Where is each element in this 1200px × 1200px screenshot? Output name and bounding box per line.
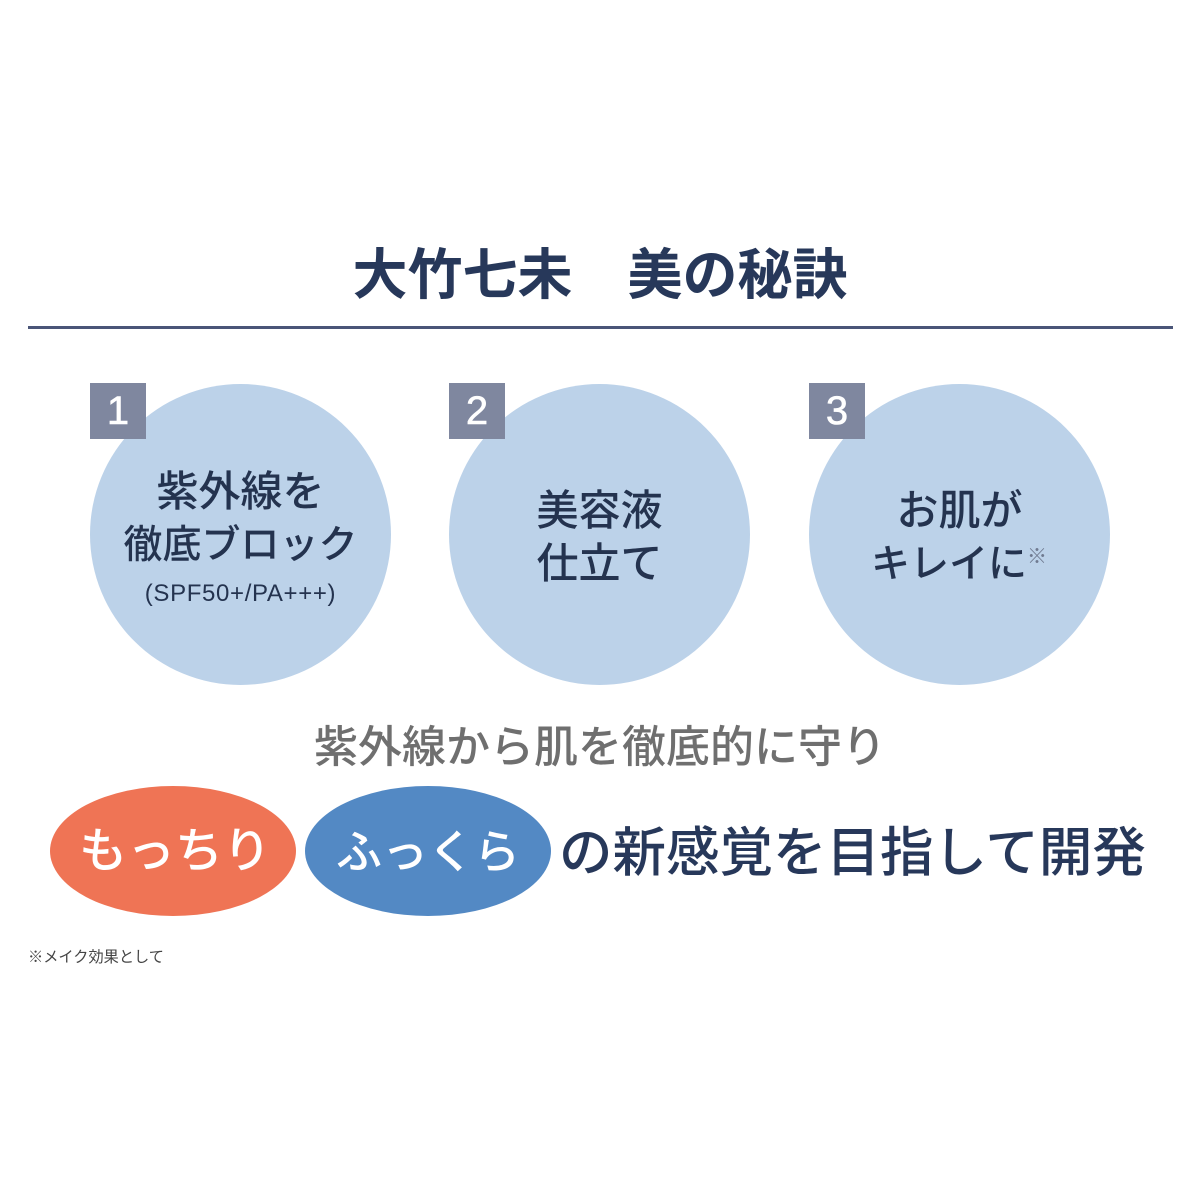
- title rule: [28, 326, 1173, 329]
- asterisk mark: ※: [1027, 546, 1047, 568]
- circle 1: [90, 384, 391, 685]
- tagline: の新感覚を目指して開発: [559, 824, 1146, 883]
- badge 3: 3: [826, 389, 848, 433]
- point 1 text line 2: 徹底ブロック: [123, 524, 358, 567]
- point 3 text: お肌が: [896, 487, 1022, 534]
- pill label: mocchiri: もっちり: [79, 825, 271, 878]
- pill: mocchiri: [50, 786, 296, 916]
- point 1 text: 紫外線を: [156, 468, 324, 515]
- panel: point 2: [449, 383, 750, 685]
- footnote: ※メイク効果として: [28, 949, 164, 966]
- point 1 note: (SPF50+/PA+++): [145, 580, 336, 607]
- badge 2: [449, 383, 505, 439]
- badge 2: 2: [466, 389, 488, 433]
- pill label: fukkura: ふっくら: [336, 826, 520, 878]
- pill: fukkura: [305, 786, 551, 916]
- point 2 text line 2: 仕立て: [536, 540, 662, 587]
- badge 3: [809, 383, 865, 439]
- title: 大竹七未 美の秘訣: [352, 244, 848, 306]
- badge 1: 1: [107, 389, 129, 433]
- badge 1: [90, 383, 146, 439]
- point 3 text line 2: キレイに: [871, 543, 1027, 586]
- subheading: 紫外線から肌を徹底的に守り: [314, 723, 886, 772]
- circle 2: [449, 384, 750, 685]
- point 2 text: 美容液: [536, 487, 662, 534]
- circle 3: [809, 384, 1110, 685]
- panel: point 1: [90, 383, 391, 685]
- panel: point 3: [809, 383, 1110, 685]
